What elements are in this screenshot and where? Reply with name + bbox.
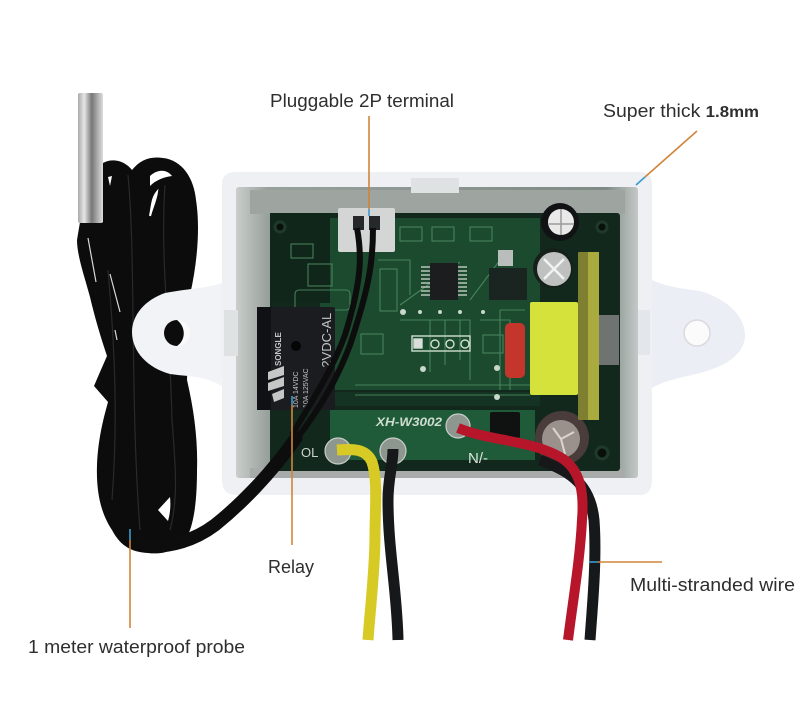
left ear hole (164, 320, 190, 346)
right ear hole (684, 320, 710, 346)
circuit board (270, 213, 620, 471)
relay: ·2VDC-AL (319, 313, 334, 372)
OL label: OL (301, 445, 318, 460)
left mounting ear (132, 282, 225, 388)
mounting holes (275, 222, 608, 459)
red wire (458, 428, 583, 640)
label: Multi-stranded wire: Multi-stranded wire (630, 574, 795, 595)
yellow transformer (530, 302, 578, 395)
metal tab (599, 315, 619, 365)
outer shell (222, 172, 652, 495)
relay: SONGLE (274, 332, 283, 366)
regulator (489, 250, 527, 300)
label: 1 meter waterproof probe: 1 meter waterproof probe (28, 636, 245, 657)
terminal connector (338, 208, 395, 252)
black component (490, 412, 520, 438)
callout line: Pluggable 2P terminal (368, 116, 370, 216)
coil gaps and highlights (108, 171, 172, 521)
black wire from relay output (388, 449, 398, 640)
probe sensor tip (78, 93, 103, 223)
terminal screws (325, 414, 470, 464)
board model label: XH-W3002 (375, 415, 442, 429)
callout line: Super thick (636, 131, 697, 185)
red capacitor (505, 323, 525, 378)
relay: 10A 14VDC (293, 371, 300, 408)
microcontroller chip (421, 263, 467, 300)
callout line: Multi-stranded wire (589, 561, 662, 563)
wires (337, 428, 595, 640)
small vertical power board (578, 252, 599, 420)
N label: N/- (468, 450, 488, 467)
capacitors (533, 203, 589, 465)
device housing (132, 172, 745, 495)
board silkscreen pads (400, 309, 500, 400)
label: Relay: Relay (268, 556, 315, 577)
right latch (638, 310, 650, 355)
relay (257, 307, 335, 410)
callout line: Relay (291, 396, 293, 545)
label: Pluggable 2P terminal: Pluggable 2P terminal (270, 90, 454, 111)
left latch (224, 310, 238, 356)
callout line: waterproof probe (129, 529, 131, 628)
probe cable coil (77, 158, 198, 553)
pin header (412, 336, 470, 351)
inner cavity (236, 187, 638, 478)
black power wire (540, 460, 595, 640)
probe cable to connector (145, 228, 373, 546)
relay: 10A 125VAC (303, 368, 310, 408)
board traces (291, 227, 535, 395)
top latch (411, 178, 459, 193)
label: Super thick 1.8mm: Super thick 1.8mm (603, 100, 759, 121)
right mounting ear (648, 278, 745, 390)
yellow wire (337, 449, 376, 640)
